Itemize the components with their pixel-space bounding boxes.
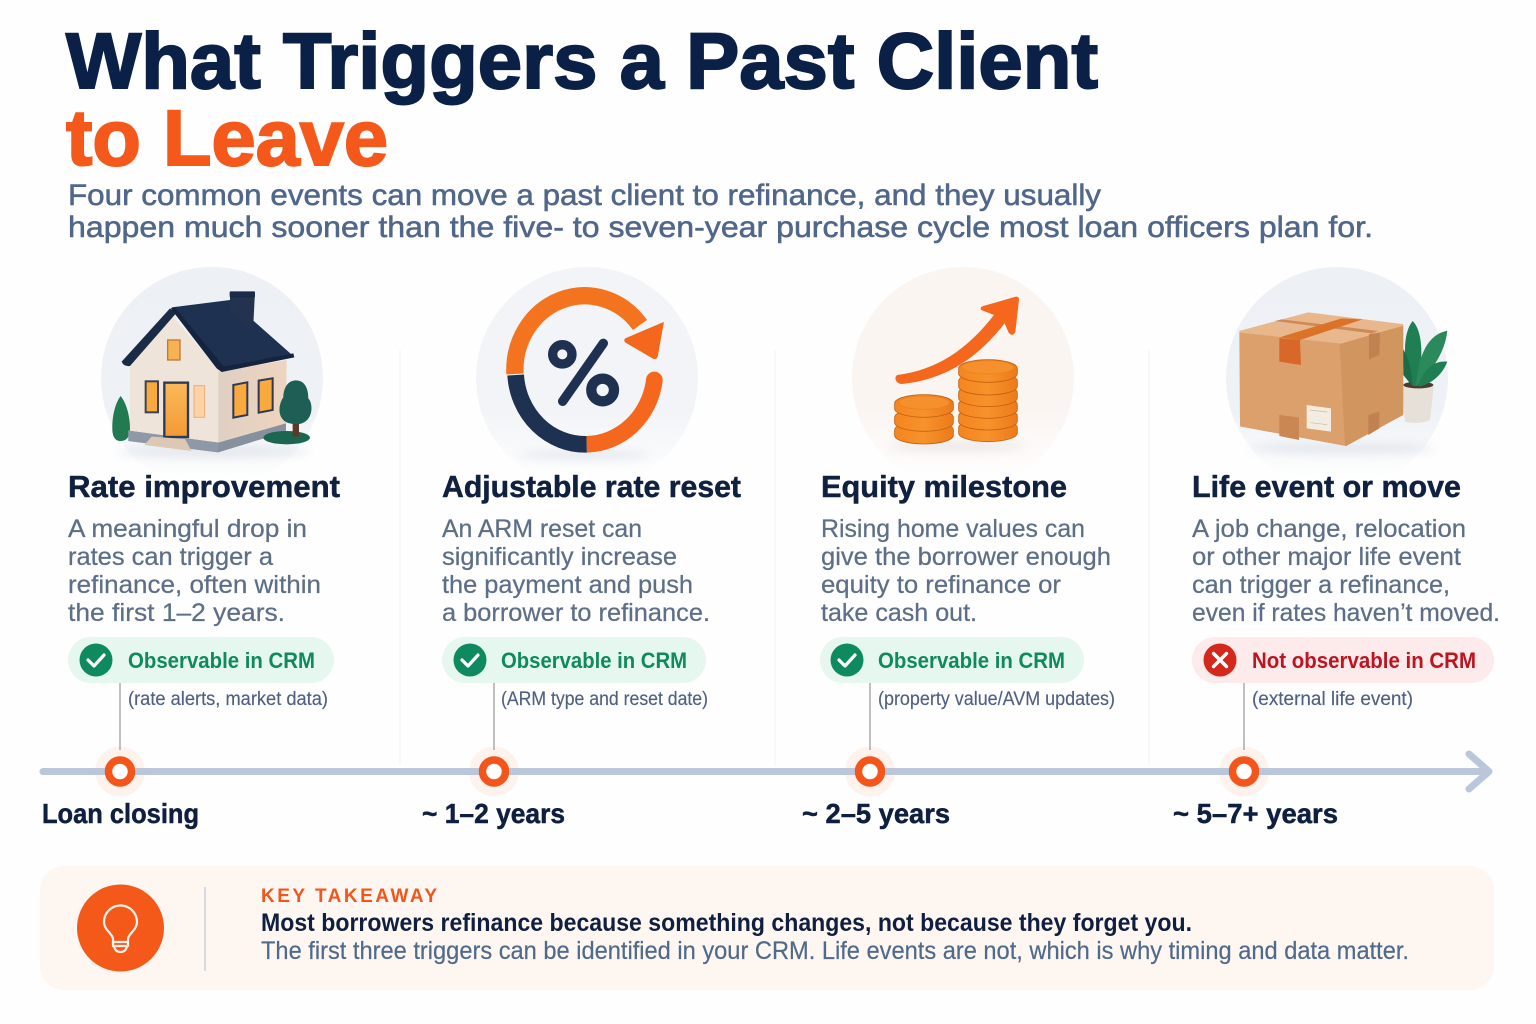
badge: observable in CRM xyxy=(442,637,706,683)
badge: not observable in CRM xyxy=(1192,637,1494,683)
label: loan closing: Loan closing xyxy=(42,798,199,829)
title xyxy=(66,16,1098,182)
body: equity milestone xyxy=(821,515,1111,627)
badge: not observable in CRM: Not observable in CRM xyxy=(1252,648,1476,673)
body: life event or move: even if rates haven’t moved. xyxy=(1192,599,1500,627)
badge: observable in CRM: Observable in CRM xyxy=(878,648,1065,673)
body: equity milestone: Rising home values can xyxy=(821,515,1085,543)
badge: observable in CRM: Observable in CRM xyxy=(128,648,315,673)
body: rate improvement: the first 1–2 years. xyxy=(68,599,285,627)
body: adjustable rate reset xyxy=(442,515,710,627)
body: life event or move: or other major life event xyxy=(1192,543,1461,571)
body: equity milestone: equity to refinance or xyxy=(821,571,1061,599)
body: rate improvement: refinance, often within xyxy=(68,571,321,599)
timeline xyxy=(42,683,1489,829)
panel: key takeaway xyxy=(40,866,1494,990)
body: adjustable rate reset: significantly increase xyxy=(442,543,677,571)
panel: equity milestone xyxy=(820,267,1115,710)
heading: equity milestone: Equity milestone xyxy=(821,469,1067,504)
title: to Leave xyxy=(66,93,388,182)
timeline axis arrow xyxy=(43,754,1489,789)
label: key takeaway: KEY TAKEAWAY xyxy=(261,886,437,907)
body: adjustable rate reset: An ARM reset can xyxy=(442,515,642,543)
marker: 2–5 years xyxy=(858,760,882,783)
body: rate improvement: A meaningful drop in xyxy=(68,515,307,543)
icon: coins and growth arrow xyxy=(852,267,1074,489)
body: life event or move xyxy=(1192,515,1500,627)
label: 2–5 years: ~ 2–5 years xyxy=(802,798,950,829)
takeaway detail: The first three triggers can be identified in your CRM. Life events are not, which is why timing and data matter. xyxy=(261,937,1409,965)
note: data source: (ARM type and reset date) xyxy=(501,689,708,710)
badge: observable in CRM xyxy=(820,637,1084,683)
badge: observable in CRM xyxy=(68,637,334,683)
icon: light bulb xyxy=(77,884,164,972)
marker: 1–2 years xyxy=(482,760,506,783)
label: 1–2 years: ~ 1–2 years xyxy=(422,798,565,829)
subtitle xyxy=(68,179,1373,244)
body: equity milestone: give the borrower enough xyxy=(821,543,1111,571)
icon: percent cycle xyxy=(476,267,698,489)
panel: life event or move xyxy=(1192,267,1500,710)
title: What Triggers a Past Client xyxy=(66,16,1098,105)
note: data source: (rate alerts, market data) xyxy=(128,689,328,710)
body: life event or move: can trigger a refinance, xyxy=(1192,571,1450,599)
marker: 5–7+ years xyxy=(1232,760,1256,783)
icon: house xyxy=(101,267,323,489)
label: 5–7+ years: ~ 5–7+ years xyxy=(1173,798,1338,829)
heading: life event or move: Life event or move xyxy=(1192,469,1461,504)
note: data source: (external life event) xyxy=(1252,689,1413,710)
body: equity milestone: take cash out. xyxy=(821,599,977,627)
body: life event or move: A job change, relocation xyxy=(1192,515,1466,543)
subtitle: happen much sooner than the five- to seven-year purchase cycle most loan officers plan for. xyxy=(68,211,1373,244)
icon: moving box and plant xyxy=(1226,267,1448,489)
marker: loan closing xyxy=(108,760,132,783)
body: rate improvement: rates can trigger a xyxy=(68,543,273,571)
body: rate improvement xyxy=(68,515,321,627)
note: data source: (property value/AVM updates) xyxy=(878,689,1115,710)
panel: rate improvement xyxy=(68,267,340,710)
badge: observable in CRM: Observable in CRM xyxy=(501,648,687,673)
takeaway headline: Most borrowers refinance because something changes, not because they forget you. xyxy=(261,909,1192,937)
panel: adjustable rate reset xyxy=(442,267,741,710)
heading: adjustable rate reset: Adjustable rate reset xyxy=(442,469,741,504)
heading: rate improvement: Rate improvement xyxy=(68,469,340,504)
subtitle: Four common events can move a past client to refinance, and they usually xyxy=(68,179,1101,212)
body: adjustable rate reset: a borrower to refinance. xyxy=(442,599,710,627)
body: adjustable rate reset: the payment and push xyxy=(442,571,693,599)
